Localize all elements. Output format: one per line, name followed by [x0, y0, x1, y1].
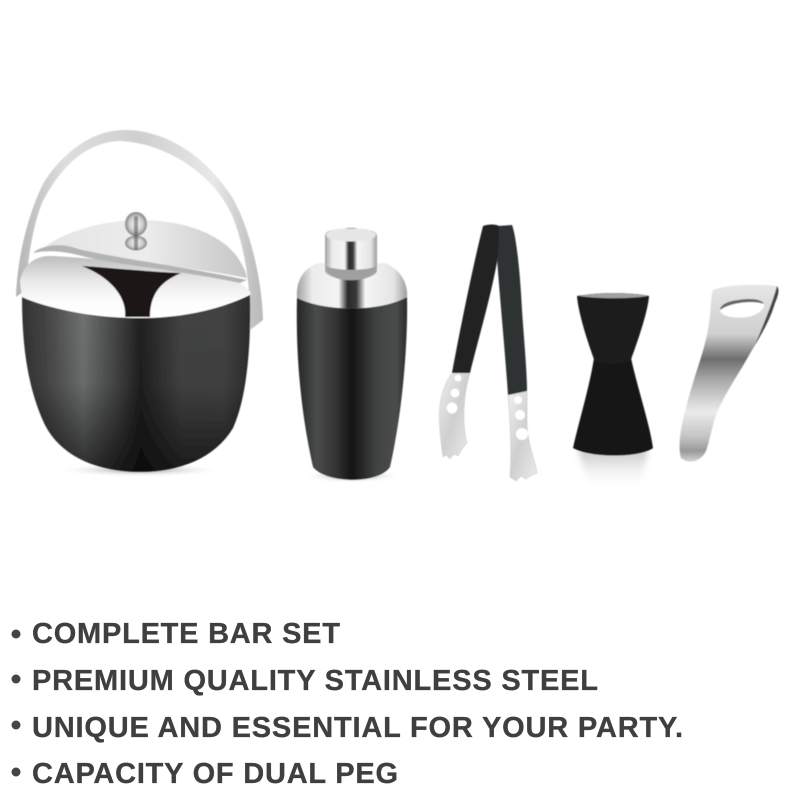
bullet item: premium quality: PREMIUM QUALITY STAINLESS STEEL	[32, 665, 598, 697]
feature list	[12, 618, 683, 790]
icon: bottle opener	[680, 285, 778, 462]
bullet item: unique and essential: UNIQUE AND ESSENTIAL FOR YOUR PARTY.	[32, 712, 683, 744]
icon: bucket lid knob	[125, 212, 147, 250]
icon: cocktail shaker	[297, 228, 407, 483]
bullet item: capacity: CAPACITY OF DUAL PEG	[32, 758, 398, 790]
bullet item: complete bar set: COMPLETE BAR SET	[32, 618, 340, 650]
icon: ice tongs	[439, 224, 537, 481]
icon: ice bucket	[16, 130, 263, 477]
icon: dual peg jigger	[573, 293, 653, 490]
